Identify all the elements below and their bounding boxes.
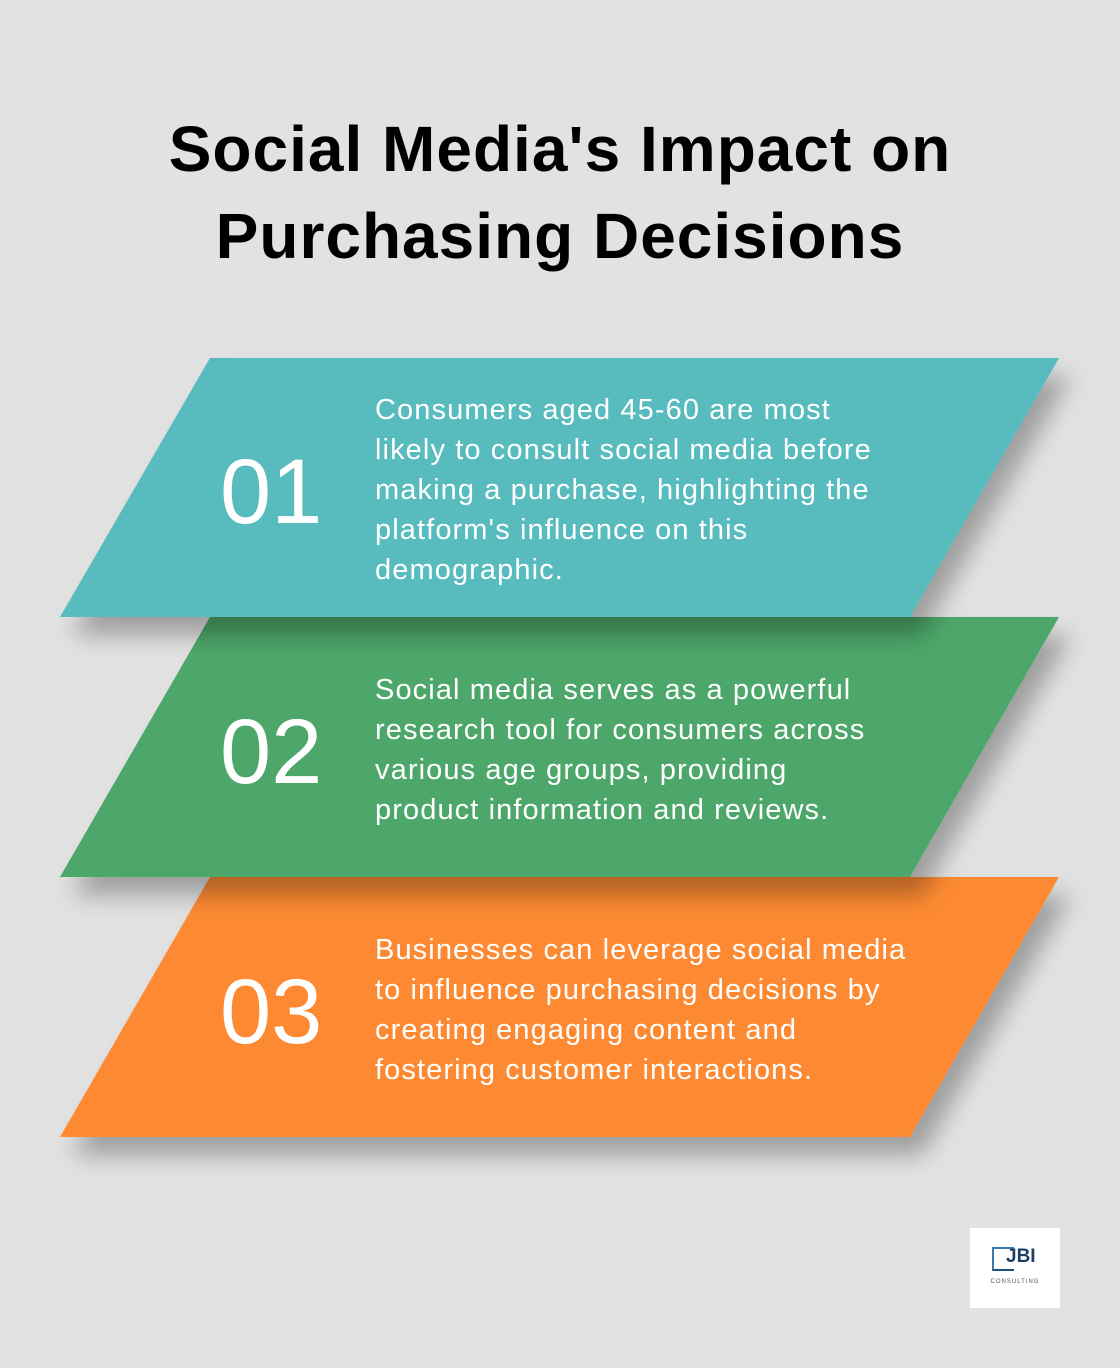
logo: CONSULTING <box>991 1279 1039 1285</box>
logo mark <box>992 1247 1014 1271</box>
text 01: making a purchase, highlighting the <box>375 474 870 506</box>
logo: JBI <box>1006 1246 1036 1267</box>
panel 2 shape <box>60 617 1059 877</box>
text 03 <box>375 934 906 1086</box>
text 01 <box>375 394 872 586</box>
logo <box>970 1228 1060 1308</box>
text 03: Businesses can leverage social media <box>375 934 906 966</box>
text 01: likely to consult social media before <box>375 434 872 466</box>
text 01: platform's influence on this <box>375 514 748 546</box>
text 03: to influence purchasing decisions by <box>375 974 880 1006</box>
text 03: fostering customer interactions. <box>375 1054 813 1086</box>
text 02: product information and reviews. <box>375 794 829 826</box>
text 02: Social media serves as a powerful <box>375 674 851 706</box>
panel 3 shape <box>60 877 1059 1137</box>
number 03: 03 <box>220 961 322 1063</box>
text 01: Consumers aged 45-60 are most <box>375 394 831 426</box>
title <box>169 113 951 272</box>
number 02: 02 <box>220 701 322 803</box>
text 02: various age groups, providing <box>375 754 787 786</box>
title: Social Media's Impact on <box>169 113 951 185</box>
text 02 <box>375 674 865 826</box>
title: Purchasing Decisions <box>216 200 904 272</box>
number 01: 01 <box>220 441 322 543</box>
panel 1 shape <box>60 358 1059 617</box>
text 02: research tool for consumers across <box>375 714 865 746</box>
text 03: creating engaging content and <box>375 1014 797 1046</box>
text 01: demographic. <box>375 554 564 586</box>
